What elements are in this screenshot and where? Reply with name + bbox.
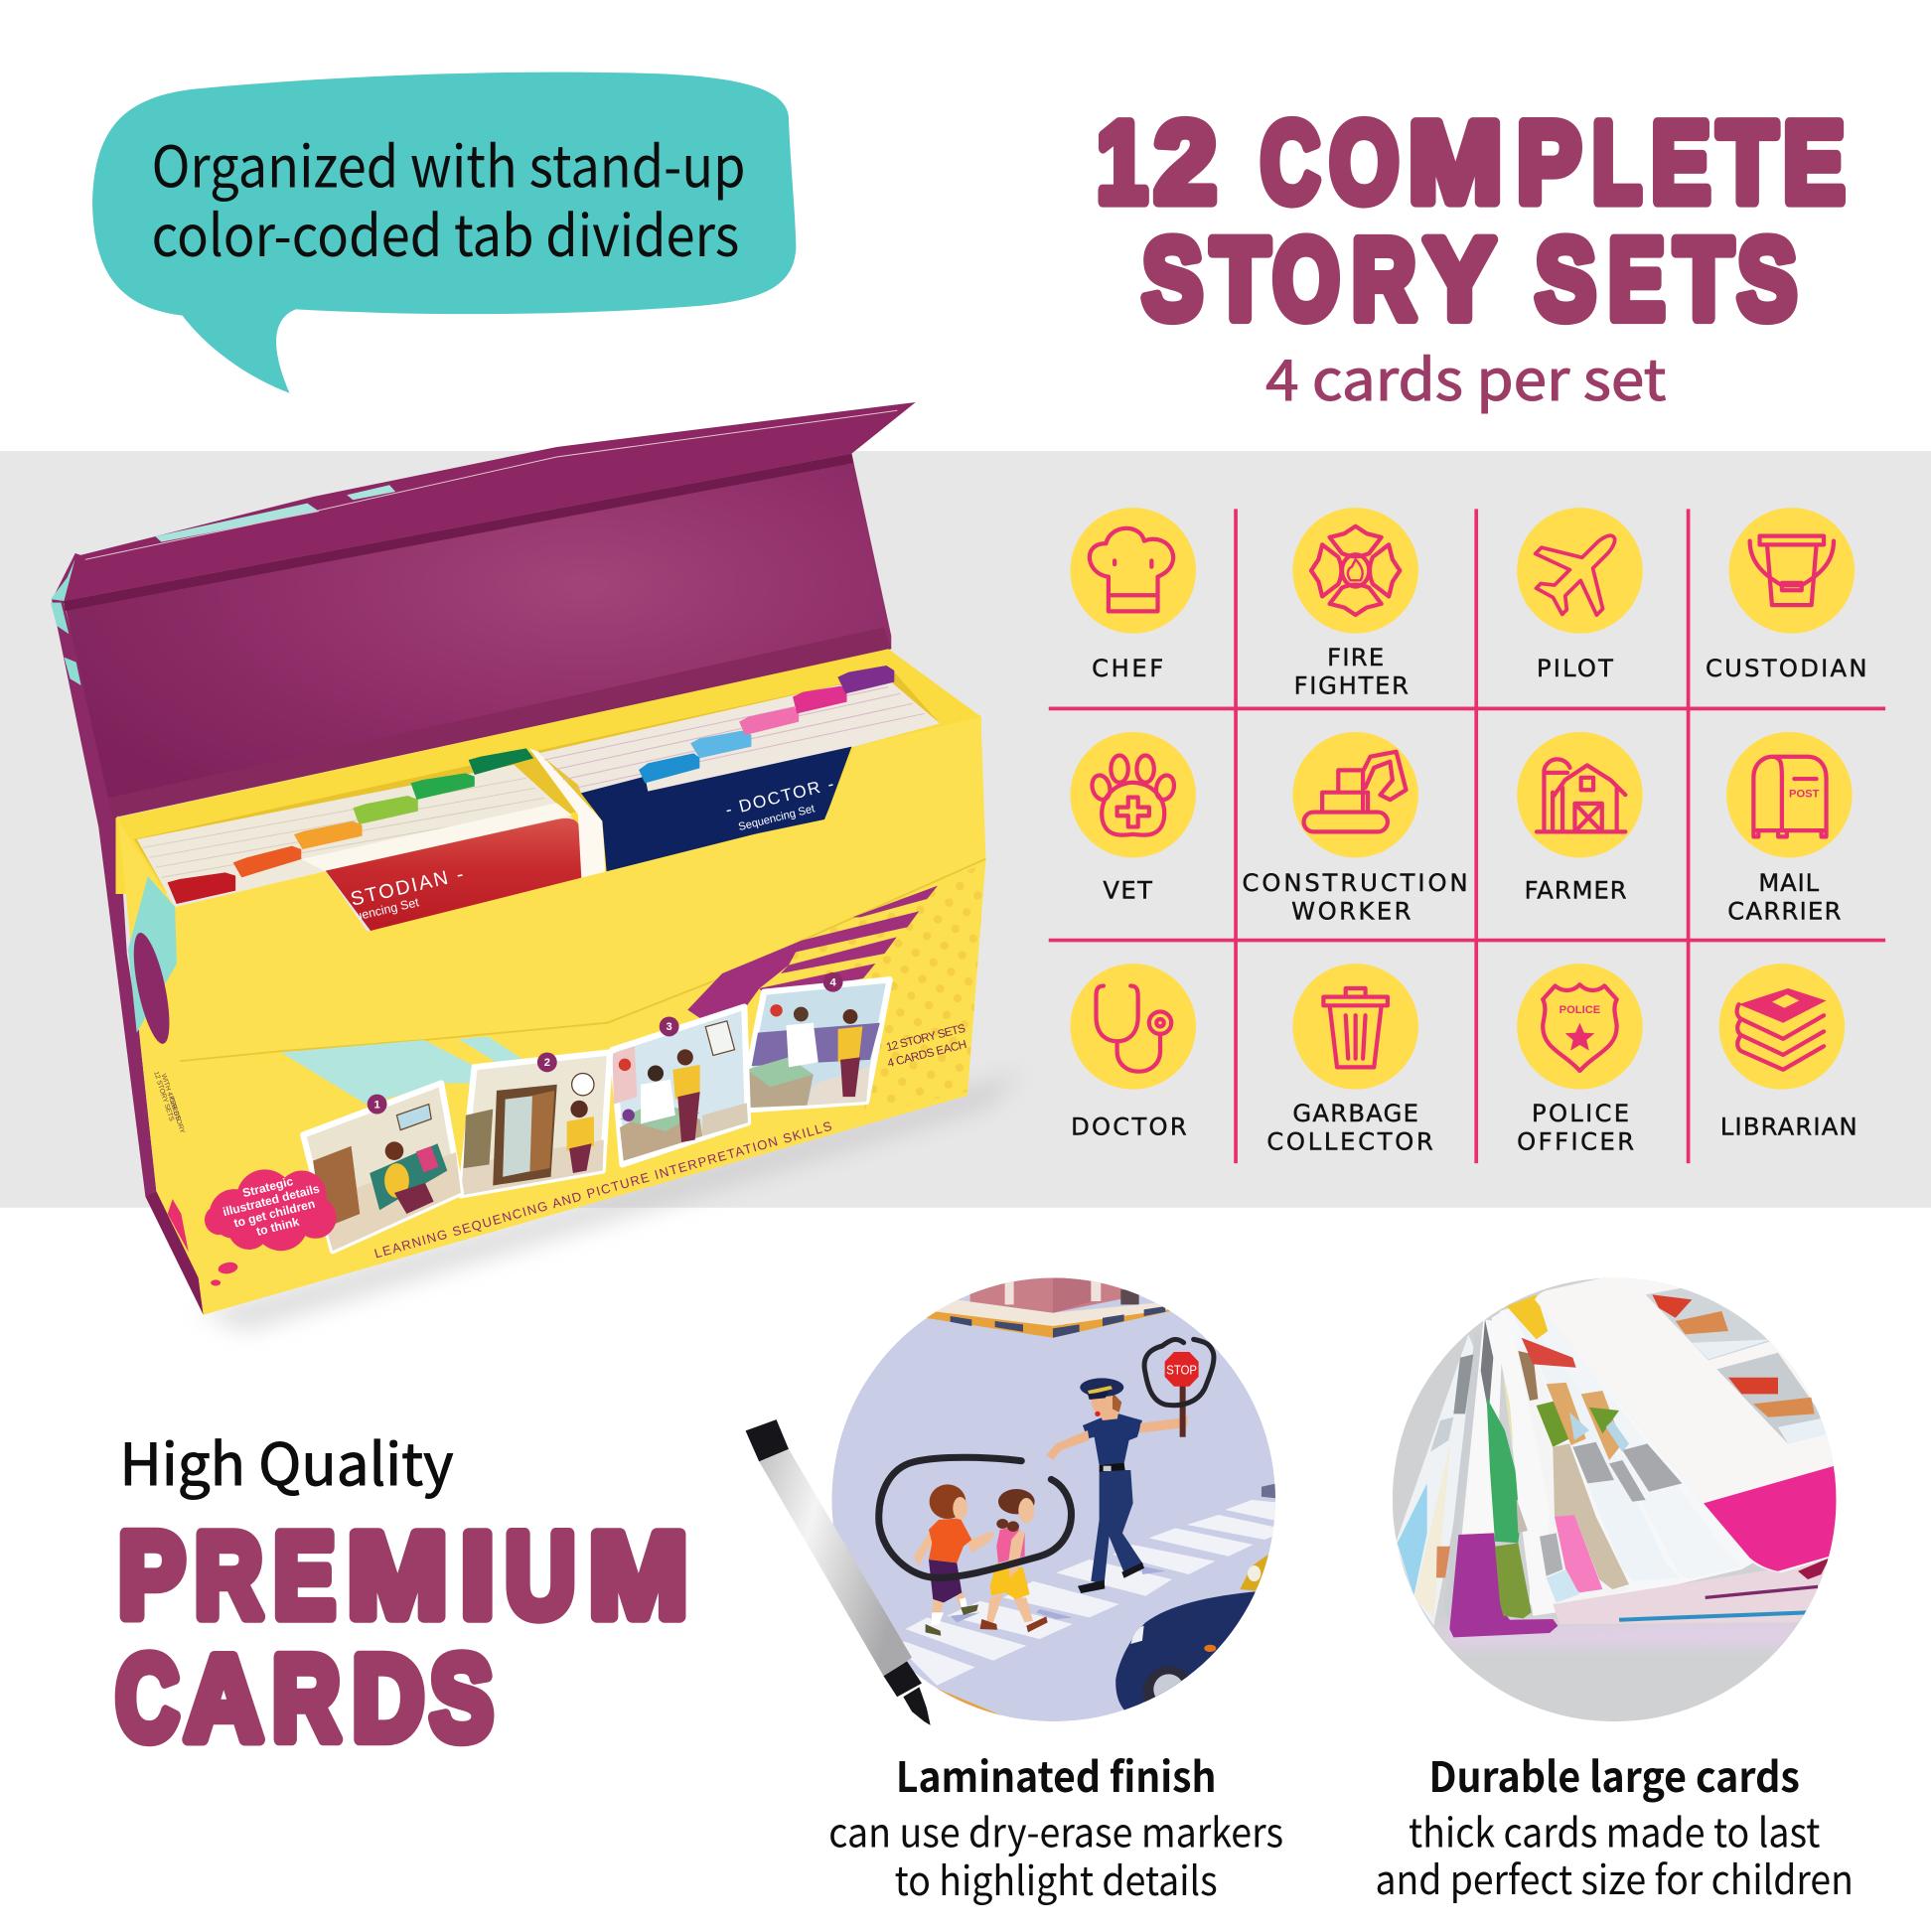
- floor shadow: [1433, 1621, 1801, 1646]
- occupation labels: DOCTOR: [1071, 1114, 1187, 1141]
- lid side edge: [52, 553, 157, 1197]
- stop sign: STOP: [1166, 1363, 1197, 1377]
- occupation labels: CHEF: [1092, 655, 1163, 682]
- side small text: WITH 4 CARDS: [160, 1073, 182, 1121]
- white card strip: [1492, 1313, 1547, 1606]
- front pocket: [152, 859, 985, 1315]
- girl: [980, 1489, 1048, 1632]
- premium cards heading: C: [116, 1632, 179, 1765]
- icon: chef: [1070, 508, 1196, 634]
- card number badges: 4: [830, 976, 837, 988]
- occupation labels: GARBAGE: [1292, 1100, 1418, 1127]
- navy divider card: [581, 747, 851, 894]
- right card deck: [538, 666, 940, 894]
- side small text: 12 STORY SETS: [152, 1071, 175, 1122]
- stop sign: [1165, 1352, 1199, 1437]
- occupation labels: VET: [1103, 876, 1152, 904]
- open box top section: [51, 402, 981, 944]
- grid lines: [1049, 509, 1885, 1163]
- premium cards heading: S: [430, 1632, 493, 1765]
- white divider: [529, 748, 607, 894]
- premium cards heading: D: [353, 1632, 424, 1765]
- occupation labels: WORKER: [1291, 897, 1411, 925]
- title: L: [1592, 99, 1641, 226]
- premium cards heading: U: [506, 1510, 575, 1643]
- curb: [926, 1299, 1170, 1338]
- box back rim: [115, 649, 981, 894]
- durable cards photo circle: [1393, 1276, 1855, 1722]
- pink thought cloud: [205, 1168, 337, 1286]
- story card 4: [741, 979, 890, 1111]
- left color tabs: [168, 748, 533, 904]
- card number badges: 1: [374, 1099, 380, 1111]
- purple base corner: [145, 1192, 204, 1315]
- title: 1: [1097, 99, 1147, 226]
- white backing of fanned cards: [1500, 1299, 1753, 1616]
- card number badges: 3: [667, 1021, 672, 1033]
- box side tag: 4 CARDS EACH: [886, 1038, 968, 1070]
- occupation labels: CUSTODIAN: [1706, 655, 1866, 682]
- caption: durable large cards: [1375, 1744, 1854, 1906]
- card stack edge: [1553, 1560, 1835, 1624]
- title: R: [1352, 217, 1415, 344]
- title: S: [1737, 217, 1797, 344]
- purple stripes: [687, 886, 938, 1066]
- story card 3: [613, 1007, 748, 1164]
- card label custodian: STODIAN -: [349, 863, 468, 911]
- caption: durable large cards: and perfect size for children: [1375, 1848, 1854, 1906]
- title: O: [1330, 99, 1399, 226]
- white card with purple tab: [1449, 1319, 1558, 1637]
- car: [1115, 1484, 1275, 1710]
- icon: fire fighter: [1292, 508, 1418, 634]
- title: [1097, 99, 1845, 417]
- caption: laminated finish: can use dry-erase markers: [828, 1801, 1283, 1859]
- product box illustration: [51, 402, 1023, 1331]
- side small text: PER STORY: [167, 1096, 186, 1134]
- side small text: [152, 1071, 186, 1134]
- side mint diamond: [128, 876, 181, 1033]
- lid inside panel: [64, 454, 891, 817]
- premium cards heading: [116, 1417, 687, 1765]
- title: P: [1517, 99, 1581, 226]
- premium cards heading: R: [272, 1632, 340, 1765]
- inner opening: [134, 672, 940, 894]
- police officer: [1046, 1378, 1188, 1593]
- occupation labels: PILOT: [1537, 655, 1613, 682]
- caption: laminated finish: [828, 1744, 1283, 1907]
- top red and yellow edge: [1507, 1294, 1548, 1339]
- premium cards heading: M: [589, 1510, 687, 1643]
- occupation labels: FIRE: [1327, 644, 1384, 671]
- dark magenta card corner: [1798, 1558, 1830, 1579]
- card number badges: 2: [544, 1057, 550, 1069]
- title: S: [1536, 217, 1596, 344]
- title: T: [1211, 217, 1269, 344]
- card label doctor: Sequencing Set: [737, 803, 817, 833]
- card thumbnail top: [1646, 1288, 1770, 1361]
- icon: vet: [1070, 732, 1196, 857]
- lower curb piece: [936, 1688, 1001, 1715]
- caption: durable large cards: Durable large cards: [1428, 1744, 1800, 1805]
- icon: custodian: [1729, 508, 1855, 634]
- occupation labels: COLLECTOR: [1266, 1127, 1433, 1155]
- title: T: [1717, 99, 1777, 226]
- icon: mail carrier: POST: [1789, 789, 1820, 801]
- icon: police officer: POLICE: [1560, 1004, 1600, 1016]
- box side tag: [885, 1022, 968, 1070]
- occupation labels: CARRIER: [1727, 897, 1842, 925]
- side purple oval: [126, 930, 177, 1047]
- title: C: [1261, 99, 1320, 226]
- side panel: [116, 816, 204, 1315]
- box tagline: LEARNING SEQUENCING AND PICTURE INTERPRETATION SKILLS: [372, 1118, 833, 1262]
- caption: laminated finish: Laminated finish: [896, 1744, 1216, 1805]
- crosswalk stripes: [891, 1500, 1288, 1686]
- grey checked card: [1436, 1347, 1479, 1623]
- far left sky card: [1397, 1335, 1474, 1625]
- icon: doctor: [1070, 964, 1196, 1090]
- lid outer flap: [64, 402, 916, 611]
- icon: librarian: [1719, 964, 1845, 1090]
- pink thought cloud: to get children: [232, 1197, 317, 1231]
- bubble text: Organized with stand-up: [152, 121, 746, 205]
- occupation labels: LIBRARIAN: [1720, 1114, 1857, 1141]
- marker annotation circles: [879, 1339, 1214, 1577]
- box soft shadow: [197, 1072, 1023, 1331]
- premium cards heading: R: [195, 1510, 262, 1643]
- caption: laminated finish: to highlight details: [895, 1849, 1218, 1907]
- premium cards heading: M: [348, 1510, 447, 1643]
- boy: [914, 1484, 995, 1636]
- pink thought cloud: to think: [255, 1215, 301, 1239]
- occupation labels: FIGHTER: [1294, 671, 1409, 699]
- icon: farmer: [1517, 732, 1643, 857]
- occupation labels: [1071, 644, 1866, 1155]
- pale strip card: [1546, 1383, 1614, 1484]
- premium cards heading: A: [185, 1632, 262, 1765]
- cream card: [1414, 1443, 1450, 1617]
- green card: [1487, 1398, 1532, 1618]
- cream pattern card: [1504, 1378, 1514, 1444]
- premium cards heading: P: [118, 1510, 185, 1643]
- left card deck: [137, 748, 584, 944]
- speech bubble callout: [92, 73, 796, 393]
- pink thought cloud: Strategic: [241, 1174, 295, 1200]
- pink thought cloud: illustrated details: [222, 1181, 321, 1219]
- gray background band: [0, 451, 1931, 1208]
- title: S: [1142, 217, 1203, 344]
- red label on side: [168, 1199, 189, 1252]
- icon: garbage collector: [1292, 964, 1418, 1090]
- icon: police officer: [1517, 964, 1643, 1090]
- caption: durable large cards: thick cards made to last: [1409, 1801, 1820, 1859]
- marker pen: [746, 1419, 931, 1725]
- title: O: [1273, 217, 1340, 344]
- mint triangles: [281, 1040, 475, 1105]
- occupation labels: OFFICER: [1517, 1127, 1634, 1155]
- red divider card: [326, 818, 584, 944]
- occupation labels: CONSTRUCTION: [1243, 869, 1468, 897]
- lid mint corners: [51, 559, 81, 685]
- premium cards heading: E: [273, 1510, 335, 1643]
- card thumbnail lower: [1716, 1353, 1828, 1443]
- story card 2: [461, 1052, 610, 1195]
- title: E: [1783, 99, 1845, 226]
- lid hinge strip: [108, 628, 891, 817]
- pocket dot pattern: [752, 862, 985, 1115]
- title: Y: [1424, 217, 1495, 344]
- icon: pilot: [1517, 507, 1644, 634]
- tan and pink card: [1517, 1344, 1629, 1606]
- crossing shadows: [951, 1566, 1165, 1622]
- title: 2: [1154, 99, 1216, 226]
- occupation labels: FARMER: [1525, 876, 1627, 904]
- title: T: [1675, 217, 1732, 344]
- front upper panel: [175, 717, 985, 1067]
- bubble text: [152, 121, 746, 273]
- icon: mail carrier: [1726, 732, 1853, 857]
- occupation labels: POLICE: [1532, 1100, 1629, 1127]
- premium cards heading: I: [461, 1510, 494, 1643]
- bubble text: color-coded tab dividers: [152, 190, 739, 273]
- occupation labels: MAIL: [1758, 869, 1820, 897]
- title: 4 cards per set: [1265, 336, 1666, 417]
- box side tag: 12 STORY SETS: [885, 1022, 967, 1054]
- title: M: [1409, 99, 1502, 226]
- building corner: [970, 1274, 1142, 1313]
- premium cards heading: High Quality: [119, 1417, 454, 1502]
- card label doctor: - DOCTOR -: [723, 773, 837, 819]
- card label custodian: uencing Set: [354, 895, 421, 924]
- icon: construction: [1292, 732, 1418, 857]
- card number badges: [368, 972, 843, 1114]
- pale strip card two: [1522, 1337, 1683, 1502]
- title: E: [1608, 217, 1665, 344]
- big white top card: [1535, 1276, 1855, 1572]
- right color tabs: [639, 666, 894, 783]
- laminated card photo circle: [831, 1274, 1288, 1721]
- occupations grid: [1049, 507, 1885, 1163]
- story card 1: [303, 1083, 461, 1251]
- title: E: [1651, 99, 1710, 226]
